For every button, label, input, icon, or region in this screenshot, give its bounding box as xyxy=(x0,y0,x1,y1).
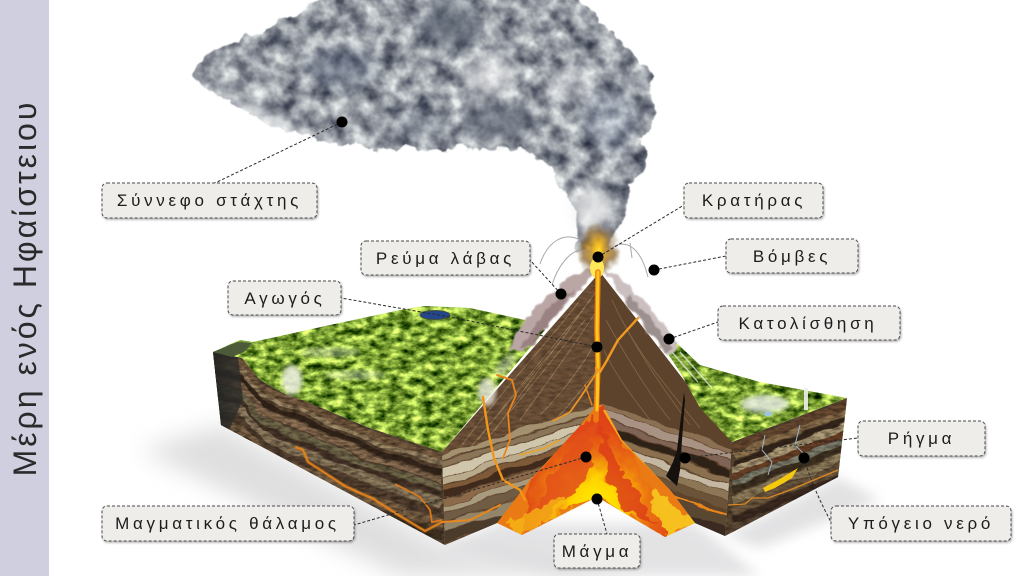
right cone section xyxy=(595,270,735,540)
right strata face xyxy=(725,398,847,536)
label: conduit xyxy=(228,281,341,315)
label: bombs xyxy=(726,239,858,273)
label: magma chamber xyxy=(102,506,354,541)
leader: groundwater xyxy=(804,458,831,522)
left cone section xyxy=(442,278,600,545)
label: groundwater xyxy=(831,506,1011,541)
title: Μέρη ενός Ηφαίστειου xyxy=(7,100,43,476)
ash slopes and crater xyxy=(508,222,678,355)
leader: magma xyxy=(597,499,607,534)
label: fault xyxy=(858,421,985,456)
leader: magma chamber xyxy=(354,457,586,525)
label: landslide xyxy=(718,306,900,340)
label: magma: Μάγμα xyxy=(562,542,632,561)
label: groundwater: Υπόγειο νερό xyxy=(848,514,994,533)
leader: crater xyxy=(598,205,684,257)
label: crater xyxy=(684,183,823,218)
label: magma chamber: Μαγματικός θάλαμος xyxy=(115,514,340,533)
leader: landslide xyxy=(669,322,718,339)
bomb trajectories xyxy=(540,237,648,285)
cloud shading xyxy=(190,3,635,230)
label: ash cloud xyxy=(102,183,317,218)
left strata face xyxy=(213,352,445,545)
magma chamber xyxy=(497,405,695,537)
label: bombs: Βόμβες xyxy=(753,247,831,266)
leader: bombs xyxy=(654,256,726,270)
leader: ash cloud xyxy=(215,122,342,183)
lava vein on left face xyxy=(295,447,442,531)
terrain: right green surface xyxy=(640,312,847,442)
marker dots xyxy=(336,116,810,504)
fault xyxy=(666,392,685,486)
ash cloud xyxy=(190,0,655,250)
label: conduit: Αγωγός xyxy=(244,289,326,308)
label: landslide: Κατολίσθηση xyxy=(739,314,877,333)
leader: lava flow xyxy=(530,260,561,294)
label: ash cloud: Σύννεφο στάχτης xyxy=(117,191,302,210)
lava channels xyxy=(442,272,638,522)
label: lava flow xyxy=(361,241,530,275)
sidebar panel xyxy=(0,0,49,576)
leader: conduit xyxy=(341,298,597,347)
label: crater: Κρατήρας xyxy=(702,191,806,210)
leader: fault xyxy=(685,438,858,458)
label: lava flow: Ρεύμα λάβας xyxy=(376,249,515,268)
label: fault: Ρήγμα xyxy=(888,429,955,448)
yellow magma pocket xyxy=(763,468,798,492)
lake in distant crater xyxy=(420,310,450,320)
ground shadow xyxy=(140,425,880,576)
terrain: left green surface xyxy=(213,306,545,452)
label: magma xyxy=(554,534,640,568)
